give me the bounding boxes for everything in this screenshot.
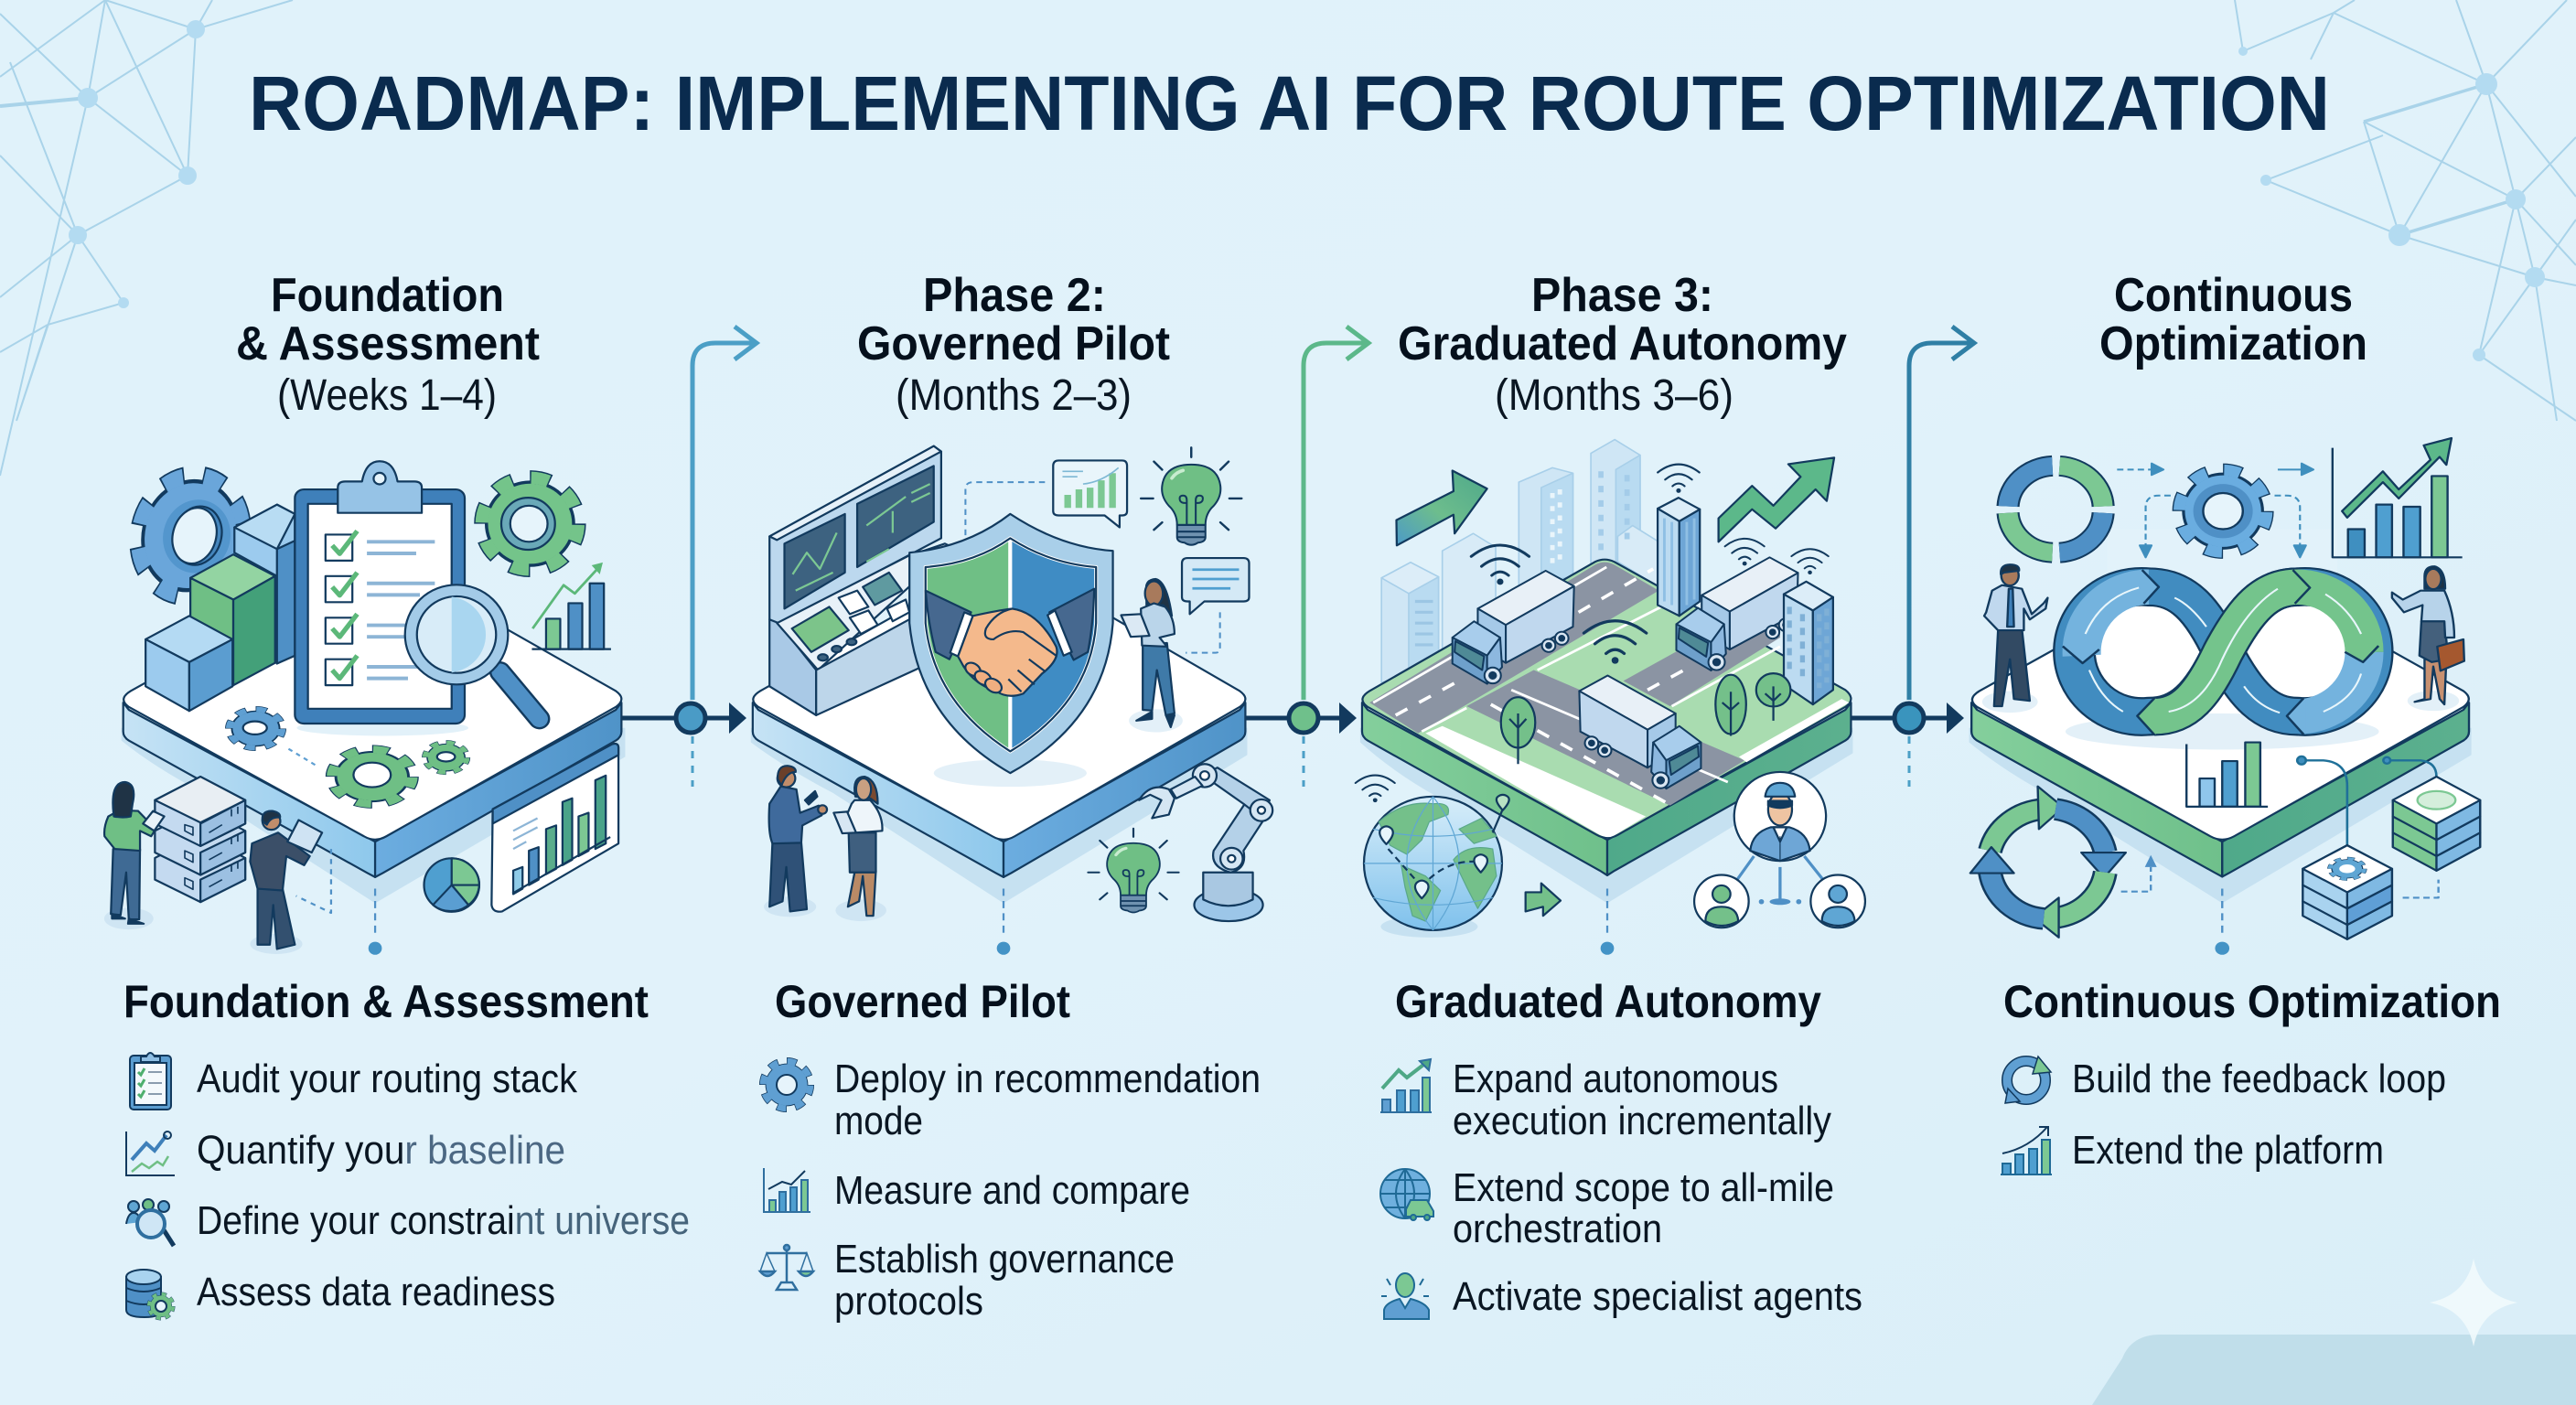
illustration: phase 2 governed pilot xyxy=(751,446,1272,955)
network pattern: top right xyxy=(2235,0,2576,421)
item text: Build the feedback loop xyxy=(2072,1056,2446,1101)
item text: Deploy in recommendation xyxy=(834,1056,1261,1101)
icon: platform gears xyxy=(230,709,467,804)
icon: light bulb top xyxy=(1141,447,1241,545)
icon: circular arrows xyxy=(1970,787,2126,938)
item text: Measure and compare xyxy=(834,1168,1190,1213)
icon: robot arm xyxy=(1139,764,1272,921)
icon: large blue gear xyxy=(126,466,254,606)
pale city buildings xyxy=(1381,440,1658,682)
illustration: phase 4 continuous optimization xyxy=(1970,438,2480,955)
figure: woman with briefcase xyxy=(2392,566,2464,711)
item icon: growth chart xyxy=(2001,1127,2052,1174)
icon: magnifying glass xyxy=(405,585,540,719)
heading: phase 3 xyxy=(1398,269,1847,420)
list heading: Foundation & Assessment xyxy=(123,976,649,1027)
item text xyxy=(1453,1056,1831,1143)
icon: small arrow xyxy=(1526,884,1561,916)
item icon: globe with van xyxy=(1380,1169,1433,1220)
item text: Activate specialist agents xyxy=(1453,1274,1862,1319)
item icon: specialist agent xyxy=(1381,1273,1429,1319)
icon: server stack xyxy=(155,777,245,902)
item text: Assess data readiness xyxy=(197,1270,555,1314)
heading: phase 4: Optimization xyxy=(2099,317,2367,370)
icon: blue gear xyxy=(2179,470,2267,552)
item text: Define your constraint universe xyxy=(197,1198,690,1243)
list heading: Governed Pilot xyxy=(775,976,1070,1027)
icon: small up arrow xyxy=(2145,855,2157,867)
icon: small bar chart xyxy=(2186,743,2268,807)
icon: truck one xyxy=(1453,571,1574,684)
corner shape: bottom right xyxy=(2092,1335,2576,1405)
item text xyxy=(834,1237,1175,1324)
list heading: Graduated Autonomy xyxy=(1395,976,1821,1027)
item text: execution incrementally xyxy=(1453,1099,1831,1143)
illustration: phase 1 foundation xyxy=(104,461,625,955)
item icon: feedback loop xyxy=(2005,1056,2051,1103)
dashed marker xyxy=(2215,889,2229,955)
platform xyxy=(1970,560,2472,903)
item text xyxy=(834,1056,1261,1143)
icon: agent network xyxy=(1694,772,1865,928)
icon: text speech bubble xyxy=(1182,558,1249,614)
icon: clipboard checklist xyxy=(295,461,468,735)
list: governed pilot xyxy=(760,976,1261,1324)
illustration: phase 3 graduated autonomy xyxy=(1356,440,1865,955)
icon: blue data stack xyxy=(2302,845,2392,939)
heading: phase 1 xyxy=(236,269,540,420)
icon: process arrows xyxy=(2117,464,2313,557)
dashed marker xyxy=(997,889,1010,955)
heading: phase 4: Continuous xyxy=(2114,269,2353,322)
item icon: trend chart xyxy=(126,1132,175,1175)
platform xyxy=(122,558,625,903)
icon: zigzag growth arrow xyxy=(1719,457,1834,542)
icon: governance shield with handshake xyxy=(909,514,1113,787)
figure: woman with tablet on platform xyxy=(1122,579,1183,732)
item text: Extend scope to all-mile xyxy=(1453,1165,1834,1210)
heading: phase 2: Phase 2: xyxy=(923,269,1106,322)
item icon: scales xyxy=(760,1245,813,1290)
item text: Quantify your baseline xyxy=(197,1128,565,1173)
icon: chart speech bubble xyxy=(1053,460,1127,528)
item text: mode xyxy=(834,1099,923,1143)
icon: tall blue tower xyxy=(1658,498,1700,616)
icon: front right building xyxy=(1784,582,1833,704)
icon: green data stack xyxy=(2393,777,2480,871)
icon: pie chart xyxy=(424,858,479,912)
icon: infinity loop xyxy=(2063,570,2382,749)
connector arrow: phase 2 to 3 xyxy=(1246,327,1368,787)
figure: man xyxy=(1982,564,2047,713)
hands xyxy=(926,589,1094,696)
item text: protocols xyxy=(834,1279,983,1324)
dashed marker xyxy=(1601,889,1614,955)
icon: growth bar chart xyxy=(2333,438,2463,557)
icon: light bulb bottom xyxy=(1088,829,1179,913)
icon: globe with pins xyxy=(1364,795,1509,938)
heading: phase 2 xyxy=(857,269,1170,420)
network pattern: top left xyxy=(0,0,293,476)
icon: mini bar chart with trend xyxy=(531,563,611,649)
title: ROADMAP: IMPLEMENTING AI FOR ROUTE OPTIMIZATION xyxy=(249,60,2330,146)
icon: truck three xyxy=(1579,675,1701,788)
figure: woman with clipboard xyxy=(833,777,886,921)
item text: orchestration xyxy=(1453,1207,1662,1251)
icon: blue green arrow xyxy=(1396,471,1487,545)
list heading: Continuous Optimization xyxy=(2003,976,2501,1027)
item icon: people and magnifier xyxy=(126,1199,174,1246)
figure: man with laptop xyxy=(250,811,322,954)
heading: phase 4 xyxy=(2099,269,2367,370)
heading: phase 3: Graduated Autonomy xyxy=(1398,317,1847,370)
icon: control console xyxy=(769,446,952,715)
list: graduated autonomy xyxy=(1380,976,1862,1319)
dashed leader xyxy=(296,849,331,913)
heading: phase 1: & Assessment xyxy=(236,317,540,370)
heading: phase 1: (Weeks 1–4) xyxy=(277,371,497,420)
item icon: growth chart xyxy=(1380,1059,1432,1112)
icon: segmented ring xyxy=(2008,466,2103,552)
icon: trees xyxy=(1501,673,1790,764)
item text: Audit your routing stack xyxy=(197,1056,578,1101)
sparkle xyxy=(2430,1259,2517,1346)
icon: dashboard window xyxy=(491,744,618,912)
item icon: gear xyxy=(763,1061,810,1109)
platform xyxy=(1360,560,1852,903)
background patch behind infinity notch xyxy=(2107,529,2337,660)
item icon: clipboard xyxy=(130,1053,171,1110)
item text xyxy=(1453,1165,1834,1251)
dashed marker xyxy=(369,889,381,955)
heading: phase 1: Foundation xyxy=(271,269,504,322)
item text: Expand autonomous xyxy=(1453,1056,1778,1101)
figure: woman with tablet xyxy=(104,782,165,929)
connectors xyxy=(2297,756,2436,845)
heading: phase 2: (Months 2–3) xyxy=(896,371,1132,420)
heading: phase 2: Governed Pilot xyxy=(857,317,1170,370)
icon: dashed link to chart xyxy=(965,482,1045,536)
icon: truck two xyxy=(1676,557,1798,670)
platform xyxy=(751,558,1247,903)
heading: phase 3: Phase 3: xyxy=(1531,269,1713,322)
icon: green gear xyxy=(482,477,578,570)
dashed leader xyxy=(1186,612,1220,653)
dashed leaders xyxy=(2121,867,2439,897)
roads xyxy=(1369,563,1849,837)
list: foundation and assessment xyxy=(123,976,690,1318)
item text: Establish governance xyxy=(834,1237,1175,1282)
item text: Extend the platform xyxy=(2072,1128,2384,1173)
connector arrow: phase 3 to 4 xyxy=(1852,327,1974,787)
connector arrow: phase 1 to 2 xyxy=(622,327,757,787)
icon: stacked blocks xyxy=(145,505,295,711)
list: continuous optimization xyxy=(2001,976,2501,1174)
item icon: bar chart xyxy=(764,1168,810,1212)
figure: man with document xyxy=(764,766,827,917)
heading: phase 3: (Months 3–6) xyxy=(1495,371,1733,420)
item icon: database with gear xyxy=(126,1270,173,1318)
icons: wifi signals xyxy=(1356,465,1829,802)
